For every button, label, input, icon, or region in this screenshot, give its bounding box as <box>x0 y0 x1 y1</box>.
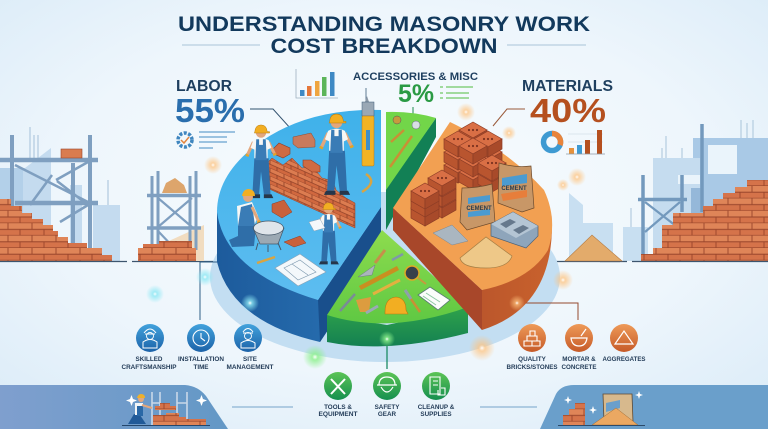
brick wall <box>267 158 355 228</box>
cement bag front: CEMENT <box>466 206 492 212</box>
wrench <box>340 294 355 311</box>
accessories icon: safety gear <box>373 372 401 418</box>
materials icon: aggregates: AGGREGATES <box>602 356 646 363</box>
labor icon: site management: MANAGEMENT <box>226 364 274 371</box>
heading: accessories 5%: ACCESSORIES & MISC <box>353 71 478 83</box>
materials icon: quality bricks and stones: BRICKS/STONES <box>506 364 558 371</box>
accessories icon: cleanup and supplies: CLEANUP & <box>418 404 455 411</box>
spirit level <box>360 268 398 288</box>
pie slice: labor <box>217 96 381 342</box>
pie shadow halo <box>210 192 560 362</box>
sand pile <box>460 237 512 268</box>
icon: labor gear and list <box>178 132 235 148</box>
bottom right band <box>540 385 768 429</box>
heading: accessories 5%: 5% <box>398 80 434 108</box>
heading: materials 40% <box>522 78 613 129</box>
divider lines <box>232 406 537 408</box>
heading: accessories 5% <box>353 71 478 108</box>
clipboard <box>418 287 450 310</box>
materials icon: aggregates <box>602 324 646 363</box>
tape measure <box>405 266 426 284</box>
icon: bar chart over labor <box>296 69 338 98</box>
second scaffold with bricks <box>138 171 204 261</box>
labor icon: skilled craftsmanship: CRAFTSMANSHIP <box>122 364 176 371</box>
pie slice: accessories lower part <box>327 230 468 346</box>
mason worker left <box>247 125 275 198</box>
mortar tub <box>253 221 284 252</box>
labor icon: site management: SITE <box>243 356 257 363</box>
heading: materials 40%: 40% <box>530 92 606 129</box>
pie slice: materials <box>393 122 552 330</box>
hard hat <box>385 297 408 314</box>
concrete block <box>491 212 538 248</box>
bricks on the floor <box>272 200 306 247</box>
trowel and curved tool <box>257 174 371 263</box>
standing worker with plan <box>316 203 340 264</box>
left construction scene <box>0 127 217 262</box>
materials icon: mortar and concrete: MORTAR & <box>562 356 596 363</box>
title <box>178 12 591 58</box>
materials icon: quality bricks and stones: QUALITY <box>518 356 547 363</box>
glow points <box>146 103 586 369</box>
labor icon: skilled craftsmanship: SKILLED <box>136 356 163 363</box>
accessories icon: cleanup and supplies: SUPPLIES <box>420 411 452 418</box>
labor icon: installation time: TIME <box>193 364 209 371</box>
accessories icon: tools and equipment <box>318 372 358 418</box>
bottom right material scene <box>558 391 645 426</box>
handheld plan <box>309 219 325 231</box>
tall brick stack <box>444 122 506 192</box>
right construction scene <box>552 120 768 262</box>
bottom left mason scene <box>122 392 210 426</box>
heading: labor 55%: 55% <box>175 92 245 129</box>
chain link <box>392 254 403 260</box>
mason worker right <box>321 114 352 195</box>
accessories icon: tools and equipment: TOOLS & <box>324 404 352 411</box>
pie slice: accessories upper part <box>386 112 436 230</box>
trowel <box>358 250 385 277</box>
labor icon: site management <box>226 324 274 371</box>
small tool <box>366 306 378 313</box>
heading: materials 40%: MATERIALS <box>522 78 613 95</box>
brick on top of wall <box>272 143 320 172</box>
labor icon: installation time <box>178 324 224 371</box>
heading: labor 55%: LABOR <box>176 78 232 95</box>
low brick stack <box>411 170 456 226</box>
loose brick <box>293 133 315 148</box>
icon: materials donut and bars <box>544 130 605 154</box>
kneeling worker <box>229 189 261 247</box>
cement bag back <box>498 163 534 212</box>
heading: labor 55% <box>175 78 245 129</box>
gloves <box>356 297 371 312</box>
materials icon: quality bricks and stones <box>506 324 558 371</box>
gray aggregate pile <box>433 225 468 245</box>
accessories icon: safety gear: SAFETY <box>375 404 400 411</box>
chisel <box>405 290 420 312</box>
cement bag front <box>460 184 495 230</box>
icon: caulk tube <box>362 96 374 166</box>
accessories icon: safety gear: GEAR <box>378 411 397 418</box>
accessories icon: cleanup and supplies <box>418 372 455 418</box>
materials icon: mortar and concrete <box>562 324 596 371</box>
blueprint <box>275 254 326 286</box>
labor icon: skilled craftsmanship <box>122 324 176 371</box>
ruler <box>373 280 400 294</box>
connector lines <box>200 88 578 369</box>
title: COST BREAKDOWN <box>270 34 498 58</box>
accessories icon: tools and equipment: EQUIPMENT <box>318 411 358 418</box>
labor icon: installation time: INSTALLATION <box>178 356 224 363</box>
cement bag back: CEMENT <box>501 186 527 192</box>
bottom left band <box>0 385 228 429</box>
materials icon: mortar and concrete: CONCRETE <box>562 364 596 371</box>
title: UNDERSTANDING MASONRY WORK <box>178 12 591 36</box>
